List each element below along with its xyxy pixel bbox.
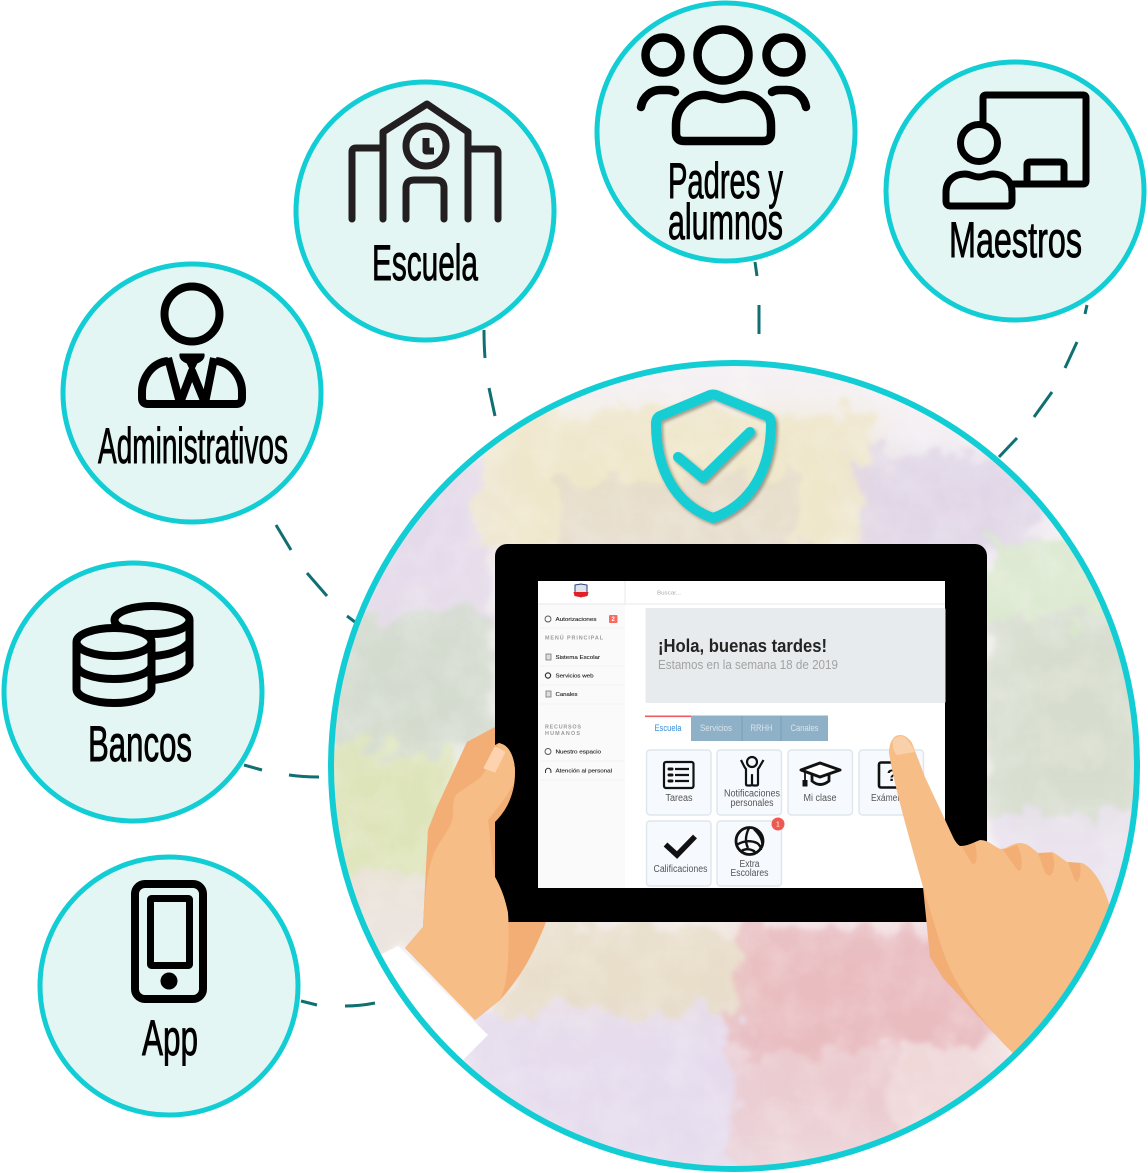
sidebar menu: [540, 615, 625, 780]
node: Padres y alumnos: alumnos: [668, 194, 783, 250]
node: App: [40, 857, 298, 1115]
icon: teacher at board: [946, 95, 1086, 206]
sidebar menu: Autorizaciones: [556, 617, 597, 623]
node: App: App: [142, 1010, 198, 1066]
tablet: [495, 544, 987, 922]
icon: exámenes: ?: [887, 766, 897, 785]
icon: administrator: [142, 286, 242, 404]
icon: exámenes: [879, 762, 902, 788]
node: Bancos: [4, 563, 262, 821]
sidebar menu: Canales: [556, 692, 578, 698]
notification badge: 1: [776, 822, 780, 828]
sidebar menu: Nuestro espacio: [556, 750, 601, 756]
notification badge: [772, 818, 784, 830]
sidebar menu: HUMANOS: [545, 731, 580, 737]
tabs: Canales: [790, 723, 819, 733]
panel: main circle with watercolor background: [320, 362, 1148, 1173]
app cards: Escolares: [730, 868, 768, 879]
sidebar menu: RECURSOS: [545, 724, 581, 730]
icon: mi clase cap: [801, 763, 840, 786]
school logo: [574, 584, 588, 597]
greeting banner: ¡Hola, buenas tardes!: [658, 636, 827, 656]
node: Padres y alumnos: [597, 3, 855, 261]
node: Padres y alumnos: Padres y: [668, 153, 783, 209]
tabs: RRHH: [750, 723, 772, 733]
right hand pointing at tablet: [889, 735, 1110, 1053]
sidebar menu: 2: [612, 617, 616, 623]
sidebar menu: Atención al personal: [556, 768, 612, 774]
tabs: Escuela: [654, 723, 682, 733]
app cards: [646, 750, 924, 886]
knuckle shading: [962, 843, 1081, 882]
tablet screen: [538, 581, 946, 888]
app cards: personales: [730, 798, 774, 809]
search box: Buscar...: [657, 590, 681, 596]
left hand holding tablet: [370, 727, 515, 1060]
tabs: Servicios: [700, 723, 732, 733]
icon: shield with check: [656, 394, 771, 518]
app cards: Notificaciones: [724, 788, 780, 800]
app cards: Extra: [740, 859, 760, 870]
dashed connectors: [244, 262, 1087, 1006]
icon: volleyball: [736, 828, 763, 854]
app cards: Calificaciones: [654, 864, 708, 875]
node: Administrativos: [63, 264, 321, 522]
icon: coin stacks: [76, 606, 190, 703]
node: Escuela: [296, 82, 554, 340]
greeting banner: [646, 608, 946, 703]
sidebar menu: Servicios web: [556, 674, 594, 680]
shirt sleeve: [370, 946, 488, 1060]
node: Maestros: [886, 62, 1144, 320]
sidebar menu: Sistema Escolar: [556, 655, 600, 661]
icon: notificaciones person: [741, 757, 764, 786]
icon: calificaciones check: [666, 836, 695, 855]
icon: group of people: [641, 30, 806, 141]
app cards: Mi clase: [804, 793, 837, 804]
fingernail: [893, 736, 915, 755]
node: Escuela: Escuela: [372, 235, 478, 291]
icon: tareas list: [664, 762, 694, 788]
node: Bancos: Bancos: [88, 716, 192, 772]
icon: school building: [352, 104, 498, 219]
icon: smartphone: [135, 884, 203, 999]
greeting banner: Estamos en la semana 18 de 2019: [658, 657, 838, 672]
tabs: [645, 716, 828, 741]
thumb nail: [484, 747, 505, 772]
app cards: Exámenes: [871, 793, 911, 804]
app cards: Tareas: [666, 793, 692, 804]
node: Administrativos: Administrativos: [98, 418, 288, 474]
main circle outline: [331, 363, 1137, 1169]
sidebar menu: MENÚ PRINCIPAL: [545, 634, 604, 642]
hand back (palm shading): [405, 727, 546, 1020]
